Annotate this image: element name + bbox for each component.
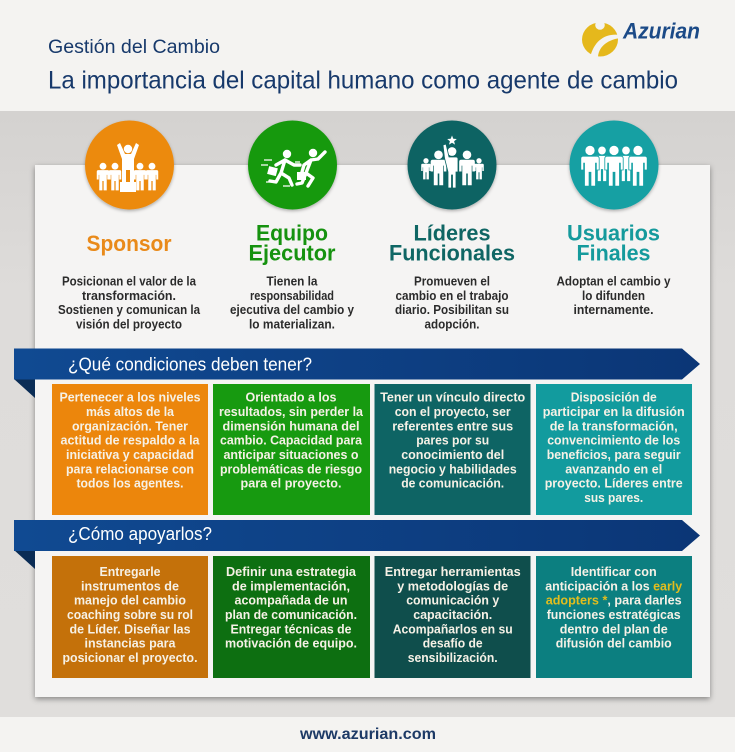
- box: apoyo sponsor: instancias para: [84, 636, 176, 651]
- box: condiciones líderes: [374, 384, 530, 515]
- column: usuarios finales: Adoptan el cambio y: [556, 275, 670, 289]
- box: condiciones sponsor: Pertenecer a los niveles: [60, 390, 200, 405]
- icon: sponsor: [85, 120, 174, 210]
- box: condiciones equipo: para el proyecto.: [240, 476, 342, 491]
- box: apoyo sponsor: instrumentos de: [81, 578, 179, 593]
- column: equipo ejecutor: lo materializan.: [249, 317, 335, 331]
- box: condiciones usuarios: proyecto. Líderes entre: [545, 476, 683, 491]
- box: condiciones sponsor: todos los agentes.: [76, 476, 184, 491]
- column: equipo ejecutor: [230, 221, 354, 331]
- box: condiciones líderes: conocimiento del: [401, 447, 504, 462]
- box: apoyo equipo: Entregar técnicas de: [230, 621, 352, 636]
- column: sponsor: [58, 231, 201, 331]
- footer url: www.azurian.com: [299, 726, 436, 743]
- box: apoyo líderes: comunicación y: [406, 593, 500, 608]
- box: condiciones sponsor: más altos de la: [86, 404, 175, 419]
- column: sponsor: Sponsor: [86, 231, 172, 256]
- box: apoyo usuarios: dentro del plan de: [560, 621, 668, 636]
- box: condiciones equipo: dimensión humana del: [222, 418, 360, 433]
- column: líderes funcionales: Funcionales: [389, 241, 515, 266]
- box: apoyo usuarios: difusión del cambio: [556, 636, 672, 651]
- box: condiciones líderes: con el proyecto, ser: [395, 404, 511, 419]
- box: apoyo líderes: y metodologías de: [397, 578, 508, 593]
- box: apoyo sponsor: [52, 556, 208, 678]
- column: líderes funcionales: diario. Posibilitan su: [395, 303, 509, 317]
- box: apoyo líderes: [374, 556, 530, 678]
- column: líderes funcionales: Líderes: [414, 221, 490, 246]
- box: condiciones equipo: problemáticas de riesgo: [220, 461, 362, 476]
- box: condiciones líderes: de comunicación.: [401, 476, 504, 491]
- column: equipo ejecutor: Tienen la: [266, 275, 318, 289]
- column: líderes funcionales: adopción.: [424, 317, 480, 331]
- icon: usuarios finales: [570, 120, 658, 210]
- box: condiciones equipo: cambio. Capacidad para: [220, 433, 363, 448]
- box: apoyo equipo: motivación de equipo.: [225, 636, 357, 651]
- title: La importancia del capital humano como agente de cambio: [48, 66, 678, 94]
- box: apoyo líderes: Acompañarlos en su: [393, 621, 513, 636]
- icon: equipo ejecutor: [248, 120, 337, 210]
- box: condiciones usuarios: participar en la difusión: [543, 404, 685, 419]
- box: condiciones usuarios: beneficios, para seguir: [547, 447, 681, 462]
- box: condiciones usuarios: Disposición de: [571, 390, 657, 405]
- heading: Gestión del Cambio: Gestión del Cambio: [48, 37, 220, 58]
- box: condiciones sponsor: para relacionarse con: [66, 461, 194, 476]
- box: condiciones líderes: Tener un vínculo directo: [380, 390, 525, 405]
- column: líderes funcionales: Promueven el: [414, 275, 490, 289]
- column: usuarios finales: lo difunden: [582, 289, 645, 303]
- box: condiciones usuarios: avanzando en el: [565, 461, 662, 476]
- box: apoyo líderes: desafío de: [423, 636, 483, 651]
- column: equipo ejecutor: Ejecutor: [248, 241, 336, 266]
- column: sponsor: Posicionan el valor de la: [62, 275, 197, 289]
- box: apoyo usuarios: funciones estratégicas: [547, 607, 681, 622]
- box: apoyo equipo: Definir una estrategia: [226, 564, 357, 579]
- box: condiciones sponsor: iniciativa y capacidad: [66, 447, 194, 462]
- column: líderes funcionales: [389, 221, 515, 331]
- box: apoyo líderes: Entregar herramientas: [385, 564, 521, 579]
- box: apoyo sponsor: Entregarle: [100, 564, 160, 579]
- box: apoyo sponsor: coaching sobre su rol: [67, 607, 193, 622]
- box: apoyo usuarios: anticipación a los early: [545, 578, 683, 593]
- banner: cómo apoyarlos: ¿Cómo apoyarlos?: [68, 523, 212, 544]
- column: sponsor: Sostienen y comunican la: [58, 303, 201, 317]
- box: condiciones usuarios: de la transformación,: [550, 418, 678, 433]
- box: condiciones equipo: [213, 384, 370, 515]
- header background: [0, 0, 735, 111]
- box: apoyo líderes: capacitación.: [413, 607, 492, 622]
- logo: Azurian: Azurian: [622, 18, 700, 44]
- box: condiciones usuarios: sus pares.: [584, 490, 643, 505]
- column: equipo ejecutor: Equipo: [256, 221, 328, 246]
- box: condiciones sponsor: organización. Tener: [72, 418, 188, 433]
- banner: qué condiciones: ¿Qué condiciones deben tener?: [68, 354, 312, 375]
- column: sponsor: visión del proyecto: [76, 317, 182, 331]
- banner: qué condiciones: [14, 348, 700, 398]
- box: apoyo sponsor: posicionar el proyecto.: [62, 650, 198, 665]
- box: condiciones líderes: referentes entre sus: [392, 418, 513, 433]
- box: condiciones sponsor: actitud de respaldo a la: [60, 433, 200, 448]
- column: líderes funcionales: cambio en el trabajo: [396, 289, 509, 303]
- main white panel: [35, 165, 710, 697]
- column: usuarios finales: [556, 221, 670, 317]
- column: equipo ejecutor: responsabilidad: [250, 289, 334, 303]
- box: condiciones usuarios: [536, 384, 692, 515]
- box: apoyo sponsor: manejo del cambio: [74, 593, 186, 608]
- box: condiciones líderes: pares por su: [416, 433, 489, 448]
- box: apoyo usuarios: Identificar con: [571, 564, 657, 579]
- column: sponsor: transformación.: [82, 289, 176, 303]
- box: condiciones equipo: Orientado a los: [246, 390, 336, 405]
- box: apoyo sponsor: de Líder. Diseñar las: [70, 621, 190, 636]
- column: usuarios finales: Finales: [576, 241, 650, 266]
- box: apoyo usuarios: adopters *, para darles: [546, 593, 682, 608]
- banner: cómo apoyarlos: [14, 520, 700, 569]
- box: apoyo equipo: acompañada de un: [234, 593, 348, 608]
- column: equipo ejecutor: ejecutiva del cambio y: [230, 303, 354, 317]
- icon: líderes funcionales: [408, 120, 496, 210]
- column: usuarios finales: internamente.: [574, 303, 654, 317]
- box: condiciones equipo: resultados, sin perder la: [219, 404, 364, 419]
- box: apoyo usuarios: [536, 556, 692, 678]
- footer background: [0, 717, 735, 752]
- box: condiciones equipo: anticipar situaciones o: [224, 447, 359, 462]
- logo: Azurian: [582, 18, 700, 58]
- box: apoyo líderes: sensibilización.: [408, 650, 498, 665]
- box: apoyo equipo: de implementación,: [232, 578, 350, 593]
- column: usuarios finales: Usuarios: [567, 221, 660, 246]
- box: condiciones usuarios: convencimiento de los: [547, 433, 680, 448]
- box: apoyo equipo: [213, 556, 370, 678]
- box: apoyo equipo: plan de comunicación.: [225, 607, 357, 622]
- box: condiciones líderes: negocio y habilidades: [389, 461, 517, 476]
- box: condiciones sponsor: [52, 384, 208, 515]
